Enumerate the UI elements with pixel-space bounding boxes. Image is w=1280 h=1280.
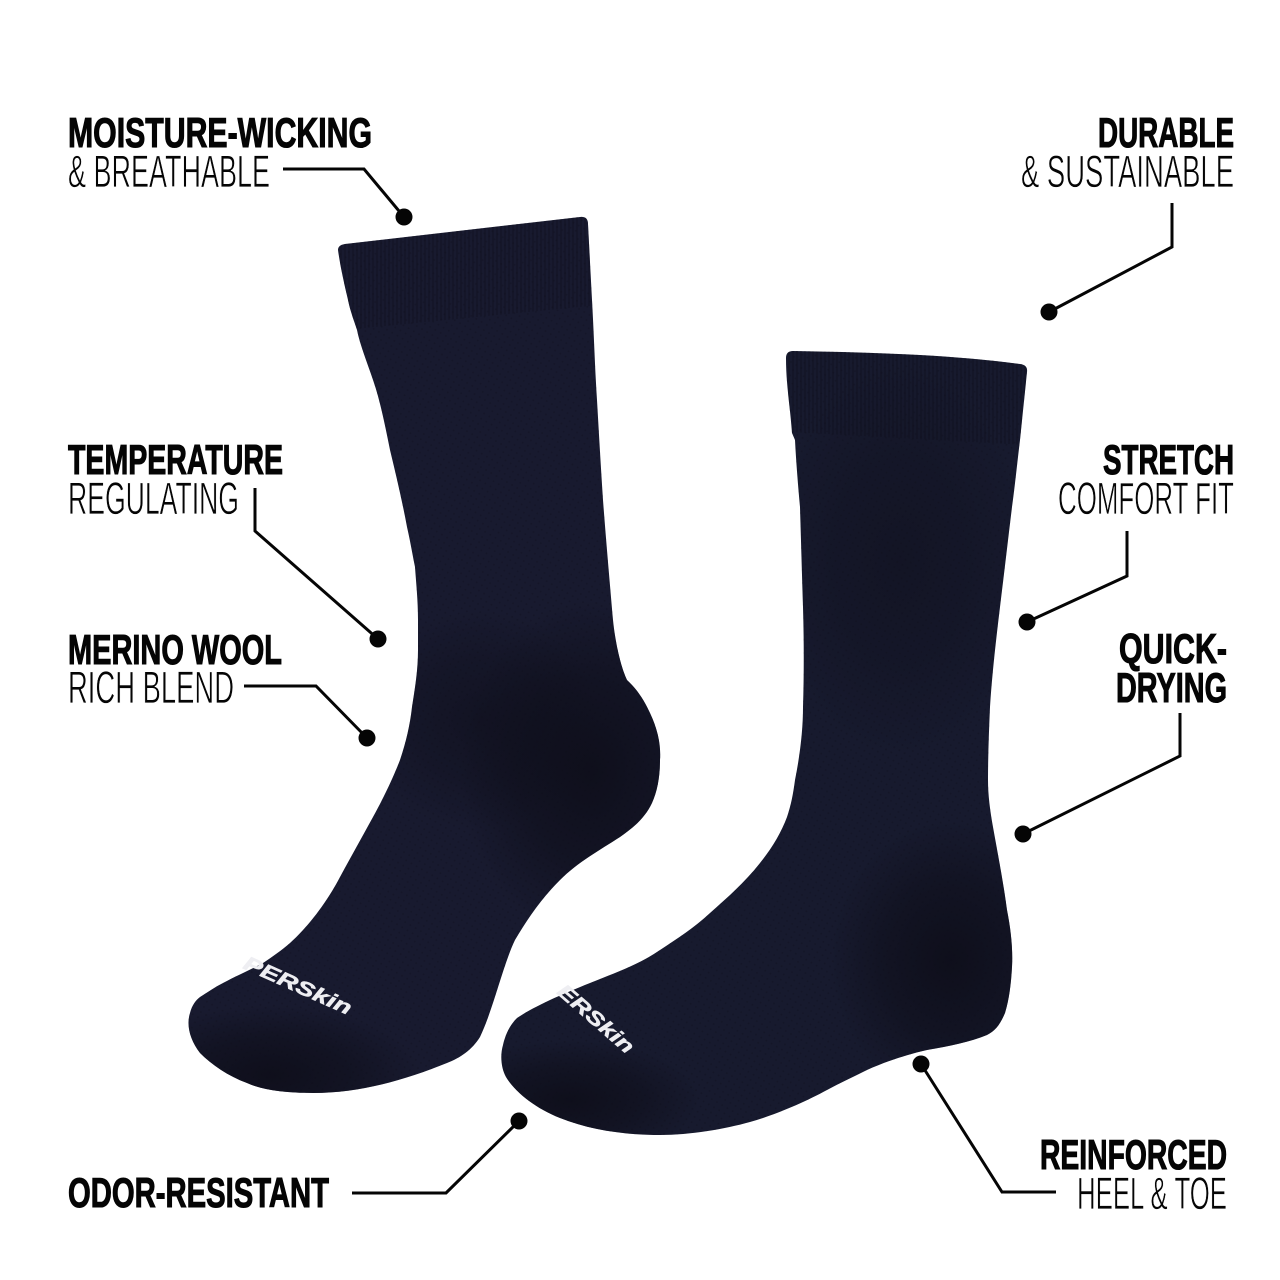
right sock logo: ERSkin xyxy=(553,980,638,1058)
callout: durable and sustainable xyxy=(1021,109,1234,320)
callout: quick-drying: QUICK- xyxy=(1119,625,1227,672)
callout: odor-resistant xyxy=(68,1112,528,1216)
callout: moisture-wicking and breathable: & BREATHABLE xyxy=(68,146,270,197)
right sock xyxy=(501,351,1028,1135)
callout: moisture-wicking and breathable: MOISTURE-WICKING xyxy=(68,109,372,156)
callout: odor-resistant: ODOR-RESISTANT xyxy=(68,1169,329,1216)
callout: temperature regulating: TEMPERATURE xyxy=(68,436,283,483)
callout: stretch comfort fit xyxy=(1018,436,1234,630)
callout: merino wool rich blend: RICH BLEND xyxy=(68,662,234,713)
callout: temperature regulating xyxy=(68,436,386,648)
callout: merino wool rich blend: MERINO WOOL xyxy=(68,626,282,673)
callout: moisture-wicking and breathable xyxy=(68,109,412,226)
callout: quick-drying: DRYING xyxy=(1116,664,1227,711)
left sock xyxy=(188,216,660,1093)
callout: merino wool rich blend xyxy=(68,626,376,746)
left sock logo: PERSkin xyxy=(240,952,355,1020)
callout: temperature regulating: REGULATING xyxy=(68,473,239,524)
callout: reinforced heel and toe xyxy=(912,1056,1227,1219)
callout: quick-drying xyxy=(1014,625,1227,842)
